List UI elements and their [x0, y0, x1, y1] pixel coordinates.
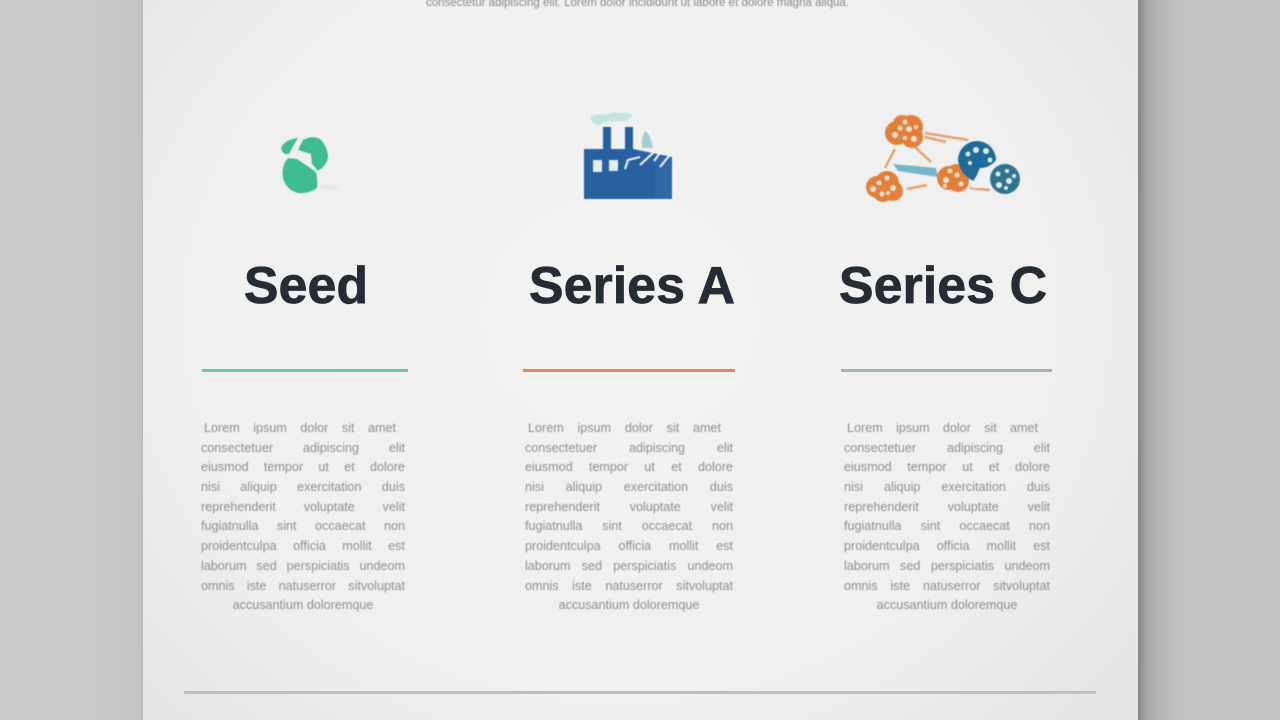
text block: Seed description: proidentculpa officia mollit est	[201, 539, 405, 553]
text block: Series A description: laborum sed perspiciatis undeom	[525, 559, 733, 573]
heading: Series A: Series A	[529, 257, 735, 315]
icon: network of clusters	[865, 114, 1021, 203]
text block: Series A description: consectetuer adipiscing elit	[525, 441, 733, 455]
icon: factory	[583, 112, 673, 200]
text block: Seed description: reprehenderit voluptate velit	[201, 500, 405, 514]
text block: Seed description: Lorem ipsum dolor sit amet	[204, 421, 396, 435]
text block: Seed description: eiusmod tempor ut et dolore	[201, 460, 405, 474]
heading: Seed: Seed	[244, 257, 368, 315]
text block: Series C description: reprehenderit voluptate velit	[844, 500, 1050, 514]
text block: Series C description: proidentculpa officia mollit est	[844, 539, 1050, 553]
text block: Series A description: reprehenderit voluptate velit	[525, 500, 733, 514]
text block: Series C description: laborum sed perspiciatis undeom	[844, 559, 1050, 573]
panel: paper sheet	[143, 0, 1138, 720]
text block: Series C description: consectetuer adipiscing elit	[844, 441, 1050, 455]
text block: Series C description: fugiatnulla sint occaecat non	[844, 519, 1050, 533]
text block: Series A description	[524, 421, 734, 612]
divider: Series A	[523, 368, 735, 372]
text block: Series C description	[844, 421, 1050, 612]
text block: Series A description: eiusmod tempor ut et dolore	[525, 460, 733, 474]
text block: Series A description: omnis iste natuserror sitvoluptat	[525, 578, 733, 592]
text block: Seed description: nisi aliquip exercitation duis	[201, 480, 405, 494]
text block: Series C description: accusantium doloremque	[877, 598, 1017, 612]
heading: Series C: Series C	[839, 257, 1047, 315]
text block: Seed description: consectetuer adipiscing elit	[201, 441, 405, 455]
text block: Series C description: nisi aliquip exercitation duis	[844, 480, 1050, 494]
text block: Series C description: omnis iste natuserror sitvoluptat	[844, 578, 1050, 592]
text block: Seed description: fugiatnulla sint occaecat non	[201, 519, 405, 533]
text block: Seed description	[200, 421, 406, 612]
text block: Series A description: proidentculpa officia mollit est	[525, 539, 733, 553]
divider: Series C	[841, 368, 1052, 372]
text block: Seed description: omnis iste natuserror sitvoluptat	[201, 578, 405, 592]
text block: Series A description: fugiatnulla sint occaecat non	[525, 519, 733, 533]
text block: Series A description: accusantium doloremque	[559, 598, 699, 612]
text block: Series C description: eiusmod tempor ut et dolore	[844, 460, 1050, 474]
text block: Seed description: laborum sed perspiciatis undeom	[201, 559, 405, 573]
text block: Seed description: accusantium doloremque	[233, 598, 373, 612]
text block: Series A description: nisi aliquip exercitation duis	[525, 480, 733, 494]
text block: Series A description: Lorem ipsum dolor sit amet	[528, 421, 721, 435]
divider: Seed	[202, 368, 408, 372]
icon: seed	[280, 136, 340, 194]
text block: Series C description: Lorem ipsum dolor sit amet	[847, 421, 1038, 435]
